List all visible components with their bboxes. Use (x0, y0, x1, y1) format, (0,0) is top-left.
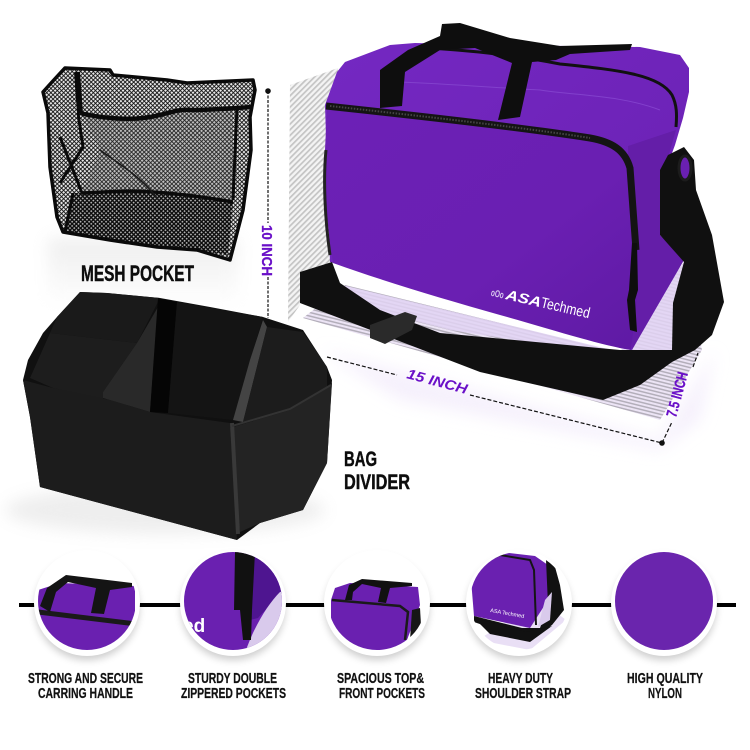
mesh body (43, 68, 255, 260)
divider floor shadow (5, 486, 325, 534)
strap buckle (370, 312, 417, 344)
bag right side panel (628, 130, 684, 350)
back left wall (50, 292, 160, 343)
brand logo: ASA (503, 286, 543, 310)
dimension: 10 inch (258, 88, 275, 318)
mesh inner shade (82, 108, 233, 200)
dimension: 15 inch: 15 INCH (405, 365, 470, 397)
label: zippered pockets: STURDY DOUBLE (188, 671, 277, 687)
brand logo (489, 283, 592, 322)
top panel fold (400, 82, 660, 110)
label: top and front pockets: SPACIOUS TOP& (337, 671, 424, 687)
label: shoulder strap: HEAVY DUTY (488, 671, 553, 687)
mesh crease (100, 150, 160, 202)
top zipper (425, 48, 677, 127)
bag body (325, 43, 689, 350)
brand logo: oOo (490, 288, 505, 301)
label: nylon: HIGH QUALITY (627, 671, 703, 687)
feature: shoulder strap (465, 550, 575, 660)
right partition (233, 320, 267, 422)
dimension: 7.5 inch: 7.5 INCH (663, 370, 692, 419)
thumbnail: strap: ASA Techmed (490, 608, 525, 620)
label: bag divider: DIVIDER (344, 471, 410, 494)
dimension: 15 inch (327, 357, 662, 443)
dimension: 7.5 inch (659, 353, 698, 446)
zipper pull (627, 243, 638, 332)
brand logo: Techmed (539, 294, 592, 322)
right side panel (230, 383, 332, 532)
right inner wall (243, 327, 327, 422)
mesh bottom (65, 192, 233, 255)
front zipper (326, 106, 636, 250)
feature: zippered pockets (180, 550, 290, 660)
panel: mesh pocket (43, 68, 255, 308)
label: top and front pockets: FRONT POCKETS (339, 686, 425, 702)
label: top and front pockets (337, 671, 425, 702)
hatched floor shadow (303, 262, 702, 420)
thumbnail: handle (38, 575, 135, 650)
mesh shadow (48, 238, 238, 308)
front panel (23, 380, 237, 540)
slanted partition (103, 307, 158, 412)
hatched backdrop (288, 68, 338, 322)
label: bag divider (344, 448, 410, 494)
soft purple floor glow (320, 350, 715, 450)
label: zippered pockets (181, 671, 286, 702)
feature: top and front pockets (322, 579, 432, 664)
mesh bands (43, 68, 255, 260)
carrying handles (380, 23, 632, 120)
label: shoulder strap: SHOULDER STRAP (475, 686, 571, 702)
panel: bag divider (5, 292, 332, 540)
front pocket (325, 108, 637, 350)
left partition (30, 333, 137, 400)
label: carrying handle: CARRING HANDLE (38, 686, 133, 702)
feature: nylon (611, 550, 717, 660)
label: zippered pockets: ZIPPERED POCKETS (181, 686, 286, 702)
label: mesh pocket: MESH POCKET (81, 261, 194, 286)
dimension: 10 inch: 10 INCH (258, 225, 275, 276)
feature: carrying handle (32, 575, 142, 664)
label: bag divider: BAG (344, 448, 377, 471)
strap ring (679, 156, 691, 180)
back right wall (168, 302, 263, 420)
thumbnail: zipper: ed (183, 616, 205, 637)
thumbnail: mini bag (331, 579, 421, 650)
label: carrying handle: STRONG AND SECURE (28, 671, 143, 687)
feature timeline line (19, 603, 736, 607)
lavender reflection (342, 262, 684, 356)
panel: bag dimension diagram (258, 23, 724, 450)
center strip (150, 298, 177, 413)
divider outer shell (23, 292, 332, 540)
label: carrying handle (28, 671, 143, 702)
label: shoulder strap (475, 671, 571, 702)
thumbnail: nylon swatch (615, 552, 713, 650)
shoulder strap (300, 147, 724, 400)
seam (232, 423, 238, 534)
label: nylon (627, 671, 703, 702)
label: nylon: NYLON (648, 686, 682, 702)
